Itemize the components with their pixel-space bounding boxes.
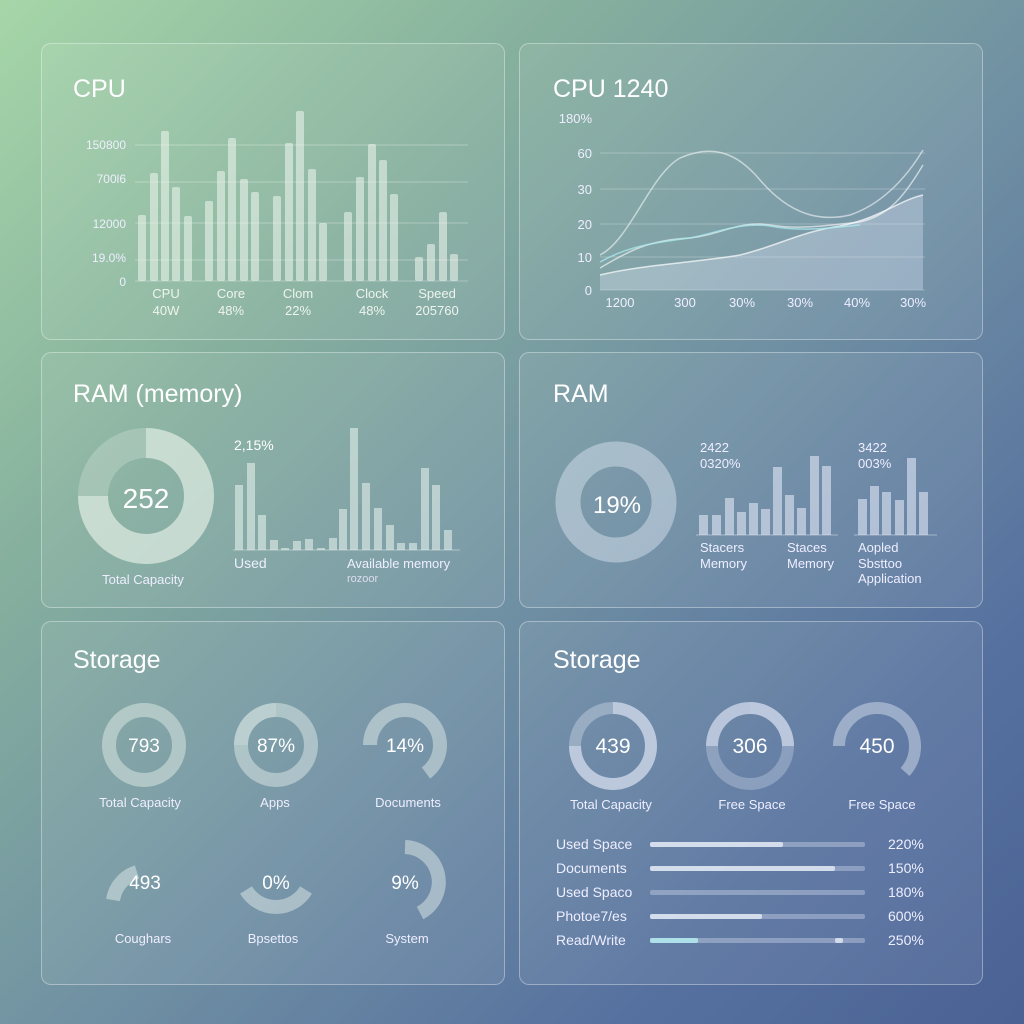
- donuts: Storage right: Free Space: [718, 797, 786, 812]
- progress bars: Storage right: 600%: [888, 908, 924, 924]
- heading: RAM (memory): RAM (memory): [73, 380, 242, 408]
- panel: CPU: [41, 43, 505, 340]
- bar chart: RAM: [696, 440, 937, 586]
- bar chart: RAM: Application: [858, 571, 922, 586]
- bar chart: CPU: Clock: [356, 286, 389, 301]
- bar chart: CPU: 150800: [86, 138, 126, 152]
- bar chart: CPU: 12000: [93, 217, 126, 231]
- bar chart: RAM: Stacers: [700, 540, 745, 555]
- donuts: Storage left: [99, 710, 441, 946]
- donuts: Storage right: 439: [595, 735, 631, 758]
- bar chart: CPU: Core: [217, 286, 245, 301]
- donuts: Storage left: 14%: [386, 736, 424, 757]
- donut: RAM 19%: 19%: [593, 492, 641, 519]
- bar chart: CPU: 40W: [153, 303, 180, 318]
- heading: Storage right: Storage: [553, 646, 641, 674]
- line chart: CPU 1240: 1200: [606, 295, 634, 310]
- bar chart: CPU: Speed: [418, 286, 456, 301]
- line chart: CPU 1240: 30: [578, 182, 592, 197]
- donuts: Storage right: Total Capacity: [570, 797, 652, 812]
- donuts: Storage left: System: [385, 931, 429, 946]
- donut: RAM 19%: [568, 454, 664, 550]
- bar chart: CPU: 22%: [285, 303, 311, 318]
- donuts: Storage left: Coughars: [115, 931, 172, 946]
- line chart: CPU 1240: 30%: [787, 295, 813, 310]
- progress bars: Storage right: Used Space: [556, 836, 632, 852]
- bar chart: RAM: Sbsttoo: [858, 556, 902, 571]
- bar chart: CPU: 205760: [415, 303, 459, 318]
- bar chart: RAM memory: 2,15%: [234, 437, 274, 453]
- bar chart: RAM: 0320%: [700, 456, 741, 471]
- bar chart: RAM: Memory: [787, 556, 834, 571]
- donuts: Storage left: 87%: [257, 736, 295, 757]
- donuts: Storage right: 450: [859, 735, 895, 758]
- bar chart: RAM: Aopled: [858, 540, 898, 555]
- donuts: Storage left: 0%: [262, 873, 290, 894]
- panel: Storage right: [519, 621, 983, 985]
- progress bars: Storage right: Read/Write: [556, 932, 626, 948]
- panel: Storage left: [41, 621, 505, 985]
- bar chart: RAM memory: Available memory: [347, 556, 451, 571]
- donuts: Storage right: 306: [732, 735, 768, 758]
- line chart: CPU 1240: 30%: [729, 295, 755, 310]
- bar chart: CPU: 48%: [359, 303, 385, 318]
- bar chart: CPU: [86, 111, 468, 318]
- bar chart: RAM: 2422: [700, 440, 729, 455]
- bar chart: RAM memory: Used: [234, 555, 267, 571]
- bar chart: RAM: Memory: [700, 556, 747, 571]
- bar chart: CPU: CPU: [152, 286, 180, 301]
- line chart: CPU 1240: 30%: [900, 295, 926, 310]
- bar chart: RAM memory: rozoor: [347, 573, 379, 585]
- panel: RAM: [519, 352, 983, 608]
- progress bars: Storage right: Documents: [556, 860, 627, 876]
- donuts: Storage right: Free Space: [848, 797, 916, 812]
- bar chart: CPU: 700l6: [97, 172, 126, 186]
- heading: Storage left: Storage: [73, 646, 161, 674]
- line chart: CPU 1240: 20: [578, 217, 592, 232]
- panel: CPU 1240: [519, 43, 983, 340]
- bar chart: CPU: 19.0%: [92, 251, 126, 265]
- line chart: CPU 1240: 40%: [844, 295, 870, 310]
- heading: CPU: CPU: [73, 75, 126, 103]
- progress bars: Storage right: Used Spaco: [556, 884, 632, 900]
- donut: RAM total capacity: Total Capacity: [102, 572, 184, 587]
- donuts: Storage left: Bpsettos: [248, 931, 299, 946]
- donuts: Storage right: [570, 708, 916, 812]
- progress bars: Storage right: 180%: [888, 884, 924, 900]
- progress bars: Storage right: Photoe7/es: [556, 908, 627, 924]
- line chart: CPU 1240: [559, 111, 926, 310]
- panel: RAM memory: [41, 352, 505, 608]
- bar chart: RAM: 3422: [858, 440, 887, 455]
- progress bars: Storage right: 250%: [888, 932, 924, 948]
- donuts: Storage left: 9%: [391, 873, 419, 894]
- donuts: Storage left: 493: [129, 873, 161, 894]
- line chart: CPU 1240: 60: [578, 146, 592, 161]
- donut: RAM total capacity: [93, 443, 199, 587]
- bar chart: CPU: 48%: [218, 303, 244, 318]
- line chart: CPU 1240: 0: [585, 283, 592, 298]
- heading: RAM: RAM: [553, 380, 609, 408]
- line chart: CPU 1240: 180%: [559, 111, 592, 126]
- donuts: Storage left: Total Capacity: [99, 795, 181, 810]
- bar chart: CPU: Clom: [283, 286, 313, 301]
- line chart: CPU 1240: 300: [674, 295, 696, 310]
- progress bars: Storage right: [556, 836, 924, 948]
- donuts: Storage left: Apps: [260, 795, 290, 810]
- progress bars: Storage right: 150%: [888, 860, 924, 876]
- heading: CPU 1240: CPU 1240: [553, 75, 668, 103]
- bar chart: RAM: Staces: [787, 540, 827, 555]
- donuts: Storage left: Documents: [375, 795, 441, 810]
- bar chart: RAM memory: [233, 428, 460, 585]
- bar chart: RAM: 003%: [858, 456, 892, 471]
- donuts: Storage left: 793: [128, 736, 160, 757]
- line chart: CPU 1240: 10: [578, 250, 592, 265]
- donut: RAM total capacity: 252: [123, 483, 169, 514]
- progress bars: Storage right: 220%: [888, 836, 924, 852]
- bar chart: CPU: 0: [119, 275, 126, 289]
